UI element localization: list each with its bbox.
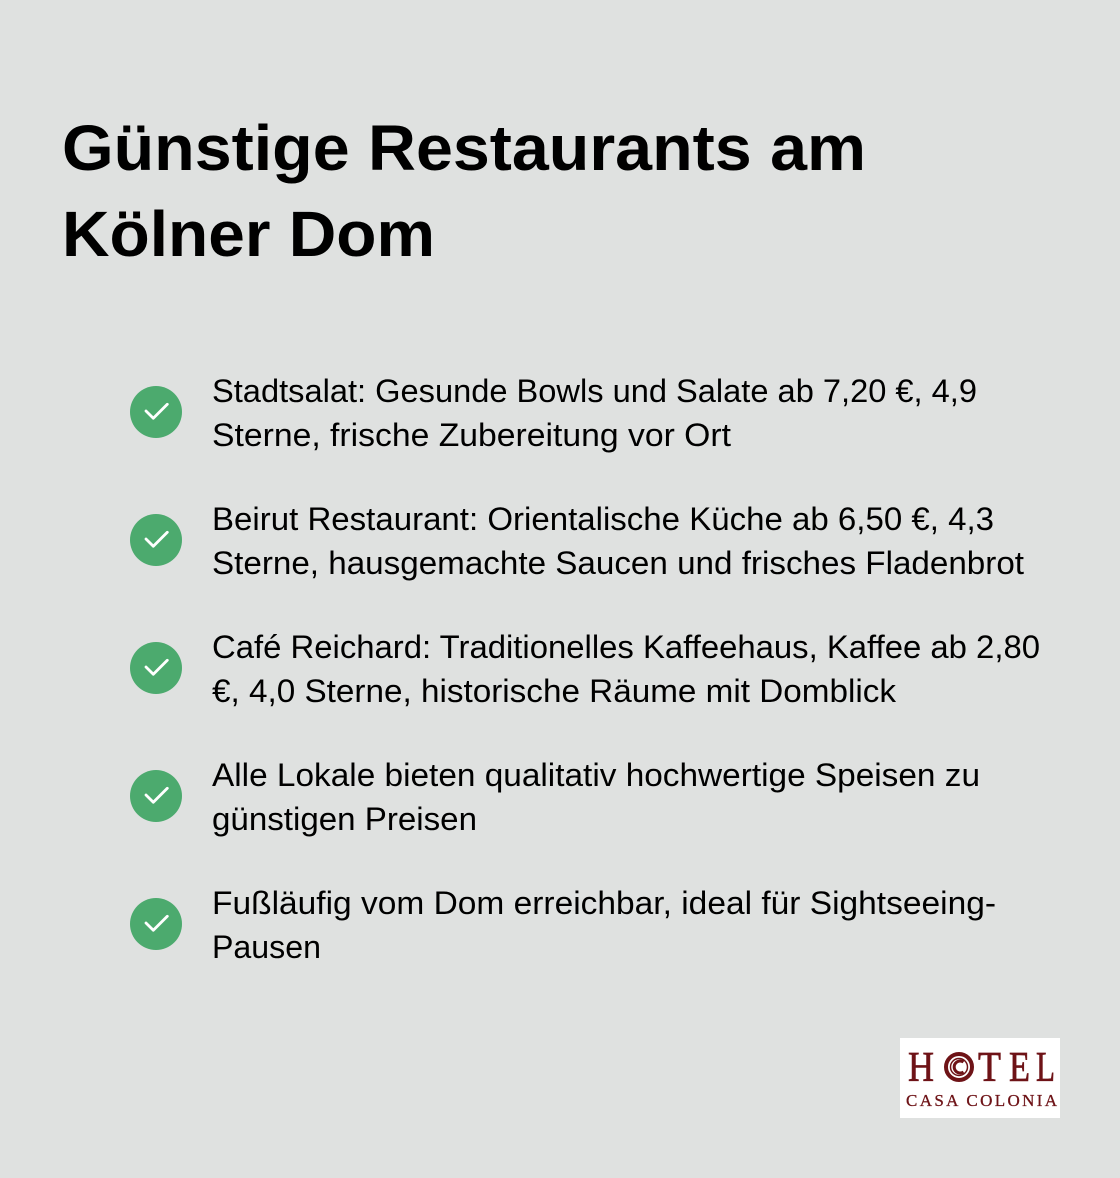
list item: Stadtsalat [130,373,977,453]
text: Stadtsalat [212,373,977,453]
text: Beirut Restaurant: Beirut Restaurant: Orientalische Küche ab 6,50 €, 4,3 [212,501,994,537]
list item: Beirut Restaurant [130,501,1024,581]
text: Alle Lokale [212,757,980,837]
icon: spiral O [946,1054,972,1080]
title [62,112,866,270]
text: Café Reichard: Café Reichard: Traditionelles Kaffeehaus, Kaffee ab 2,80 [212,629,1040,665]
text: Stadtsalat: Sterne, frische Zubereitung vor Ort [212,417,731,453]
list item: Café Reichard [130,629,1040,709]
icon: check mark [130,898,182,950]
text: Fußläufig: Pausen [212,929,321,965]
list item: Alle Lokale [130,757,980,837]
logo: Hotel Casa Colonia: CASA COLONIA [906,1091,1058,1110]
title: Kölner Dom [62,198,435,270]
logo: Hotel Casa Colonia: E [1009,1045,1030,1091]
icon: check mark [130,386,182,438]
list item: Fußläufig [130,885,996,965]
logo: Hotel Casa Colonia: L [1036,1045,1055,1091]
icon: check mark [130,642,182,694]
text: Alle Lokale: Alle Lokale bieten qualitativ hochwertige Speisen zu [212,757,980,793]
text: Stadtsalat: Stadtsalat: Gesunde Bowls und Salate ab 7,20 €, 4,9 [212,373,977,409]
text: Café Reichard: €, 4,0 Sterne, historische Räume mit Domblick [212,673,897,709]
title: Günstige Restaurants am [62,112,866,184]
logo: Hotel Casa Colonia [900,1038,1060,1118]
icon: check mark [130,514,182,566]
text: Fußläufig [212,885,996,965]
logo: Hotel Casa Colonia: H [908,1045,934,1091]
text: Beirut Restaurant: Sterne, hausgemachte Saucen und frisches Fladenbrot [212,545,1024,581]
text: Alle Lokale: günstigen Preisen [212,801,477,837]
text: Café Reichard [212,629,1040,709]
text: Beirut Restaurant [212,501,1024,581]
logo: Hotel Casa Colonia: T [978,1045,1001,1091]
text: Fußläufig: Fußläufig vom Dom erreichbar, ideal für Sightseeing- [212,885,996,921]
icon: check mark [130,770,182,822]
